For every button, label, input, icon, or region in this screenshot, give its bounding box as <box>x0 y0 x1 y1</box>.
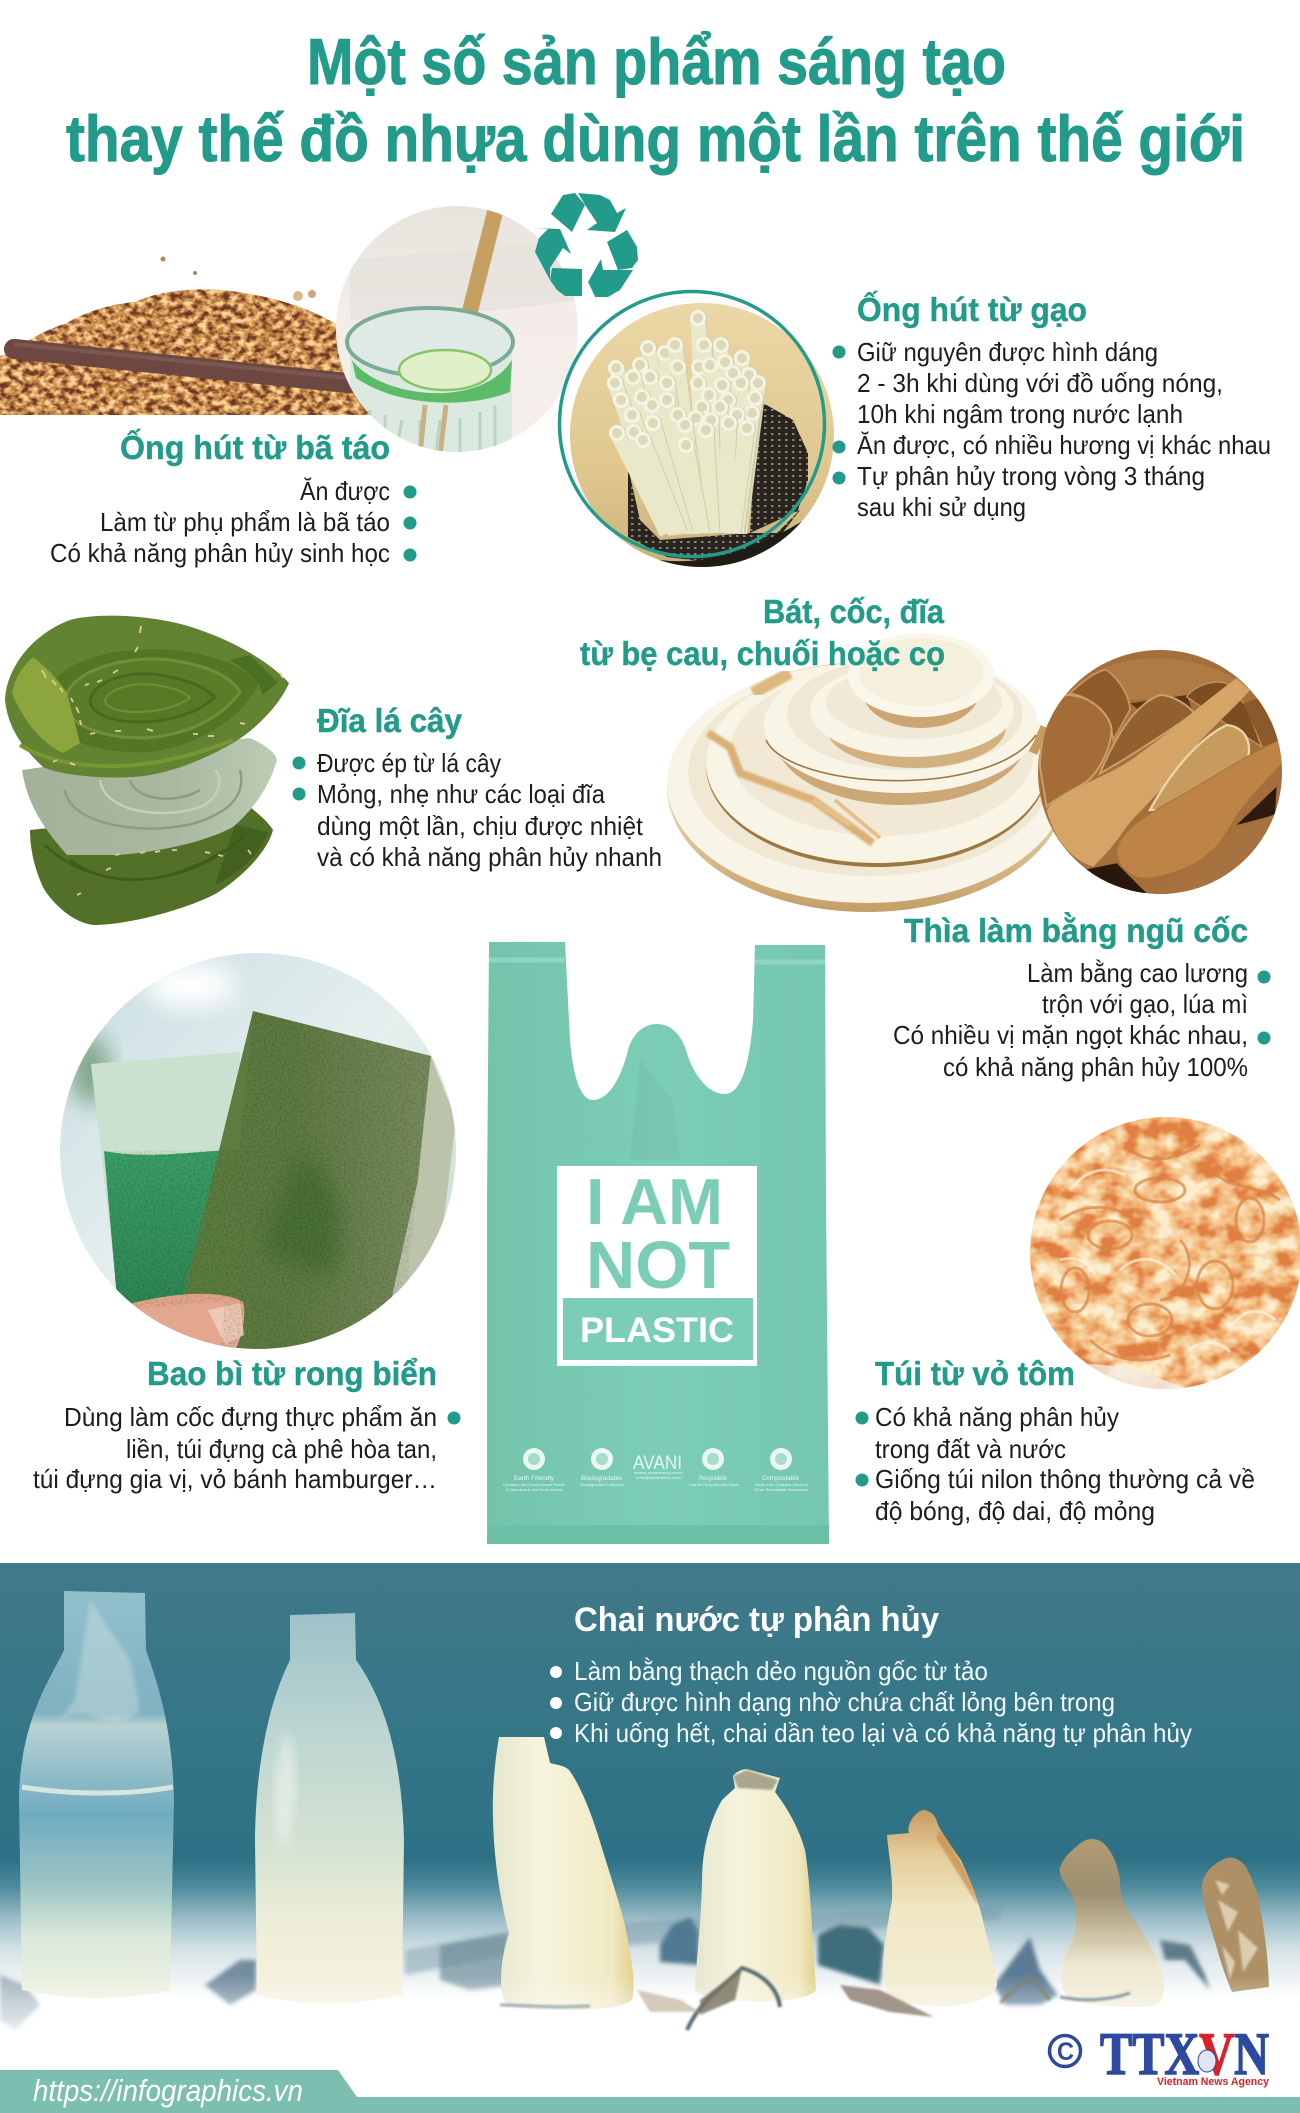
bag eco badges: Recyclable <box>699 1476 728 1482</box>
text: rice straw: sau khi sử dụng <box>857 492 1026 522</box>
bag eco badges: AVANI <box>633 1453 682 1474</box>
bag label box: NOT <box>586 1228 730 1303</box>
text: bullets: Khi uống hết, chai dần teo lại và có khả năng tự phân hủy <box>574 1718 1192 1748</box>
photo: rice straws <box>570 303 834 567</box>
text: apple pomace straw: Ăn được <box>300 476 390 506</box>
text: rice straw: Ăn được, có nhiều hương vị khác nhau <box>857 430 1271 460</box>
middle grey-green plate <box>22 738 277 855</box>
text: seaweed packaging: liền, túi đựng cà phê hòa tan, <box>126 1434 437 1464</box>
bag eco badges: Made from Cassava Starch & <box>755 1483 809 1487</box>
text: leaf plates: và có khả năng phân hủy nhanh <box>317 842 662 872</box>
bottle 4 <box>695 1769 816 2002</box>
bag eco badges: Contains No Conventional Plastic <box>503 1483 565 1487</box>
bag label box: I AM <box>586 1165 723 1238</box>
icon: recycling symbol <box>534 193 638 307</box>
text: bullets: Làm bằng thạch dẻo nguồn gốc từ tảo <box>574 1656 988 1686</box>
text: seaweed packaging <box>33 1355 460 1494</box>
text: seaweed packaging: túi đựng gia vị, vỏ bánh hamburger… <box>33 1464 437 1494</box>
bag label box: PLASTIC <box>580 1311 734 1350</box>
bottle 6 <box>1060 1839 1164 2007</box>
text: seaweed packaging: Bao bì từ rong biển <box>147 1355 437 1392</box>
text: shrimp shell bag <box>856 1355 1255 1526</box>
seaweed debris behind bottles <box>0 1905 1210 2030</box>
bag label box <box>557 1165 757 1366</box>
bottom leaf plate <box>30 807 273 925</box>
bag eco badges: www.avanieco.com <box>634 1471 683 1475</box>
text: rice straw: Tự phân hủy trong vòng 3 tháng <box>857 461 1205 491</box>
bag eco badges: Earth Friendly <box>514 1476 554 1482</box>
footer strip with url tab: https://infographics.vn <box>33 2073 303 2108</box>
photo: palm leaf plates <box>667 633 1067 912</box>
text: bowls and plates heading: từ bẹ cau, chuối hoặc cọ <box>580 635 945 672</box>
text: seaweed packaging: Dùng làm cốc đựng thực phẩm ăn <box>64 1402 437 1432</box>
bag eco badges: Biodegrades in Months <box>580 1483 624 1487</box>
bottle 1 <box>19 1591 174 1998</box>
bottle 3 <box>493 1737 634 2010</box>
ring around rice straw photo <box>560 292 824 556</box>
text: grain spoons: Có nhiều vị mặn ngọt khác nhau, <box>893 1020 1248 1050</box>
logo: TTXVN: TTXVN <box>1100 2021 1269 2087</box>
text: grain spoons: trộn với gạo, lúa mì <box>1042 989 1248 1019</box>
text: leaf plates: Đĩa lá cây <box>317 702 463 739</box>
text: bullets: Giữ được hình dạng nhờ chứa chất lỏng bên trong <box>574 1687 1115 1717</box>
text: apple pomace straw: Làm từ phụ phẩm là bã táo <box>100 507 390 537</box>
footer strip with url tab <box>0 2070 1300 2113</box>
bottle 7 <box>1202 1858 1269 1992</box>
text: grain spoons: Làm bằng cao lương <box>1027 958 1248 988</box>
bag eco badges: & Harmless to the Environment <box>506 1488 562 1492</box>
text: bowls and plates heading <box>580 593 945 672</box>
front seaweed strands <box>500 1968 1130 2030</box>
text: apple pomace straw: Có khả năng phân hủy sinh học <box>50 538 390 568</box>
photo: shrimp shells <box>1028 1115 1300 1400</box>
text: leaf plates <box>292 702 662 872</box>
panel: self-decomposing bottles <box>0 1563 1300 2053</box>
text: rice straw: Giữ nguyên được hình dáng <box>857 337 1158 367</box>
text: rice straw: Ống hút từ gạo <box>857 290 1087 328</box>
text: grain spoons: Thìa làm bằng ngũ cốc <box>904 912 1248 949</box>
bag eco badges: Other Renewable Resources <box>754 1488 808 1492</box>
bottle 2 <box>255 1613 404 2004</box>
title: Một số sản phẩm sáng tạo <box>307 25 1006 98</box>
text: rice straw <box>832 290 1271 522</box>
photo: seaweed packaging <box>55 950 465 1370</box>
text: shrimp shell bag: Giống túi nilon thông thường cả về <box>875 1464 1255 1494</box>
photo: glass with straw <box>336 206 578 452</box>
bag: I am not plastic <box>487 942 829 1544</box>
text: shrimp shell bag: độ bóng, độ dai, độ mỏng <box>875 1496 1155 1526</box>
photo: grain spoons <box>1038 650 1282 894</box>
text: leaf plates: Mỏng, nhẹ như các loại đĩa <box>317 779 605 809</box>
text: leaf plates: Được ép từ lá cây <box>317 748 501 778</box>
logo: TTXVN: C <box>1057 2038 1074 2066</box>
text: leaf plates: dùng một lần, chịu được nhiệt <box>317 811 644 841</box>
text: apple pomace straw: Ống hút từ bã táo <box>120 428 390 466</box>
text: grain spoons <box>893 912 1270 1082</box>
text: bowls and plates heading: Bát, cốc, đĩa <box>763 593 945 630</box>
bag eco badges: Compostable <box>762 1476 800 1482</box>
text: rice straw: 2 - 3h khi dùng với đồ uống nóng, <box>857 368 1223 398</box>
photo: apple pomace pile with straw <box>0 256 378 415</box>
photo: leaf plates <box>5 616 289 925</box>
leaf plate stitches <box>42 626 283 895</box>
top leaf plate <box>5 616 289 778</box>
text: shrimp shell bag: Có khả năng phân hủy <box>875 1402 1119 1432</box>
bag eco badges: Biodegradable <box>581 1476 623 1482</box>
text: shrimp shell bag: trong đất và nước <box>875 1434 1066 1464</box>
bag eco badges <box>503 1448 809 1492</box>
bottle 5 <box>883 1810 997 2006</box>
text: heading: Chai nước tự phân hủy <box>574 1601 939 1639</box>
text: shrimp shell bag: Túi từ vỏ tôm <box>875 1355 1075 1392</box>
text: bullets <box>550 1656 1192 1748</box>
logo: TTXVN: Vietnam News Agency <box>1157 2076 1270 2088</box>
text: grain spoons: có khả năng phân hủy 100% <box>943 1052 1248 1082</box>
bag eco badges: info@avanieco.com <box>636 1476 682 1480</box>
bag eco badges: Can Be Recycled with Paper <box>689 1483 740 1487</box>
text: apple pomace straw <box>50 428 416 568</box>
text: rice straw: 10h khi ngâm trong nước lạnh <box>857 399 1183 429</box>
title <box>66 25 1245 175</box>
